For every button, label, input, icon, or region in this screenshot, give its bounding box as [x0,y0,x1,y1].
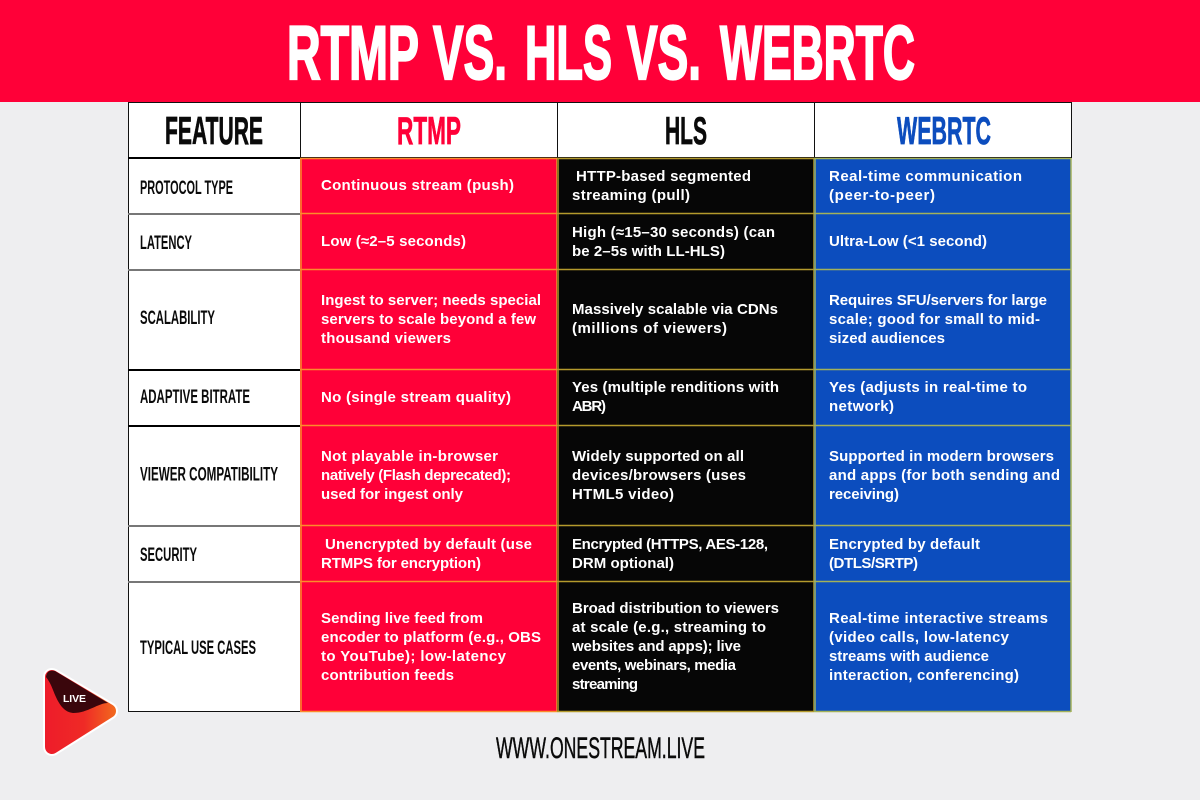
HLS column: HTML5 video) [572,486,674,503]
RTMP column: Not playable in-browser [321,448,498,465]
HLS column: High (≈15–30 seconds) (can [572,224,775,241]
HLS column: DRM optional) [572,555,674,572]
WebRTC column: (DTLS/SRTP) [829,555,918,572]
header row [128,102,1072,158]
WebRTC column: Yes (adjusts in real-time to [829,379,1027,396]
WebRTC column: network) [829,398,894,415]
HLS column: devices/browsers (uses [572,467,746,484]
HLS column: Encrypted (HTTPS, AES-128, [572,536,768,553]
header row: HLS [665,110,707,153]
RTMP column: used for ingest only [321,486,464,503]
feature column: SECURITY [140,544,197,566]
RTMP column: servers to scale beyond a few [321,311,536,328]
feature column: ADAPTIVE BITRATE [140,386,250,408]
WebRTC column: Supported in modern browsers [829,448,1054,465]
RTMP column: contribution feeds [321,667,454,684]
header row: FEATURE [165,110,263,153]
WebRTC column: (peer-to-peer) [829,187,935,204]
WebRTC column: Real-time interactive streams [829,610,1048,627]
RTMP column: Ingest to server; needs special [321,292,541,309]
title: VS. [627,11,701,96]
HLS column: streaming (pull) [572,187,690,204]
WebRTC column: sized audiences [829,330,945,347]
RTMP column: Continuous stream (push) [321,177,514,194]
HLS column: at scale (e.g., streaming to [572,619,766,636]
HLS column: websites and apps); live [571,638,741,655]
RTMP column: Low (≈2–5 seconds) [321,233,466,250]
HLS column: Widely supported on all [572,448,744,465]
HLS column [557,158,814,712]
HLS column: Yes (multiple renditions with [572,379,779,396]
feature column: VIEWER COMPATIBILITY [140,464,278,486]
WebRTC column: receiving) [829,486,899,503]
HLS column: be 2–5s with LL-HLS) [572,243,725,260]
WebRTC column: Requires SFU/servers for large [829,292,1047,309]
RTMP column: Sending live feed from [321,610,483,627]
HLS column: Massively scalable via CDNs [572,301,778,318]
RTMP column: RTMPS for encryption) [321,555,481,572]
HLS column: events, webinars, media [572,657,737,674]
title: WEBRTC [720,11,915,96]
icon: live play logo [46,671,109,747]
WebRTC column: (video calls, low-latency [829,629,1010,646]
RTMP column: encoder to platform (e.g., OBS [321,629,541,646]
WebRTC column: scale; good for small to mid- [829,311,1040,328]
HLS column: ABR) [572,398,606,415]
feature column: PROTOCOL TYPE [140,177,233,199]
WebRTC column: interaction, conferencing) [829,667,1019,684]
title banner [0,0,1200,102]
RTMP column: natively (Flash deprecated); [321,467,511,484]
feature column: LATENCY [140,232,192,254]
icon: live play logo: LIVE [63,693,86,705]
RTMP column: thousand viewers [321,330,451,347]
feature column: SCALABILITY [140,307,215,329]
title [287,11,915,96]
WebRTC column: Encrypted by default [829,536,980,553]
feature column [128,158,300,712]
HLS column: streaming [572,676,638,693]
title: VS. [433,11,507,96]
feature column: TYPICAL USE CASES [140,637,256,659]
WebRTC column [814,158,1071,712]
WebRTC column: and apps (for both sending and [829,467,1060,484]
RTMP column [300,158,557,712]
WebRTC column: Real-time communication [829,168,1022,185]
RTMP column: No (single stream quality) [321,389,511,406]
RTMP column: to YouTube); low-latency [321,648,507,665]
header row: WEBRTC [897,110,991,153]
HLS column: (millions of viewers) [572,320,727,337]
WebRTC column: streams with audience [829,648,989,665]
title: RTMP [287,11,419,96]
title: HLS [525,11,612,96]
RTMP column: Unencrypted by default (use [325,536,532,553]
HLS column: HTTP-based segmented [576,168,751,185]
HLS column: Broad distribution to viewers [572,600,779,617]
WebRTC column: Ultra-Low (<1 second) [829,233,987,250]
comparison table [128,102,1072,712]
header row: RTMP [397,110,461,153]
footer url: WWW.ONESTREAM.LIVE [496,732,705,765]
